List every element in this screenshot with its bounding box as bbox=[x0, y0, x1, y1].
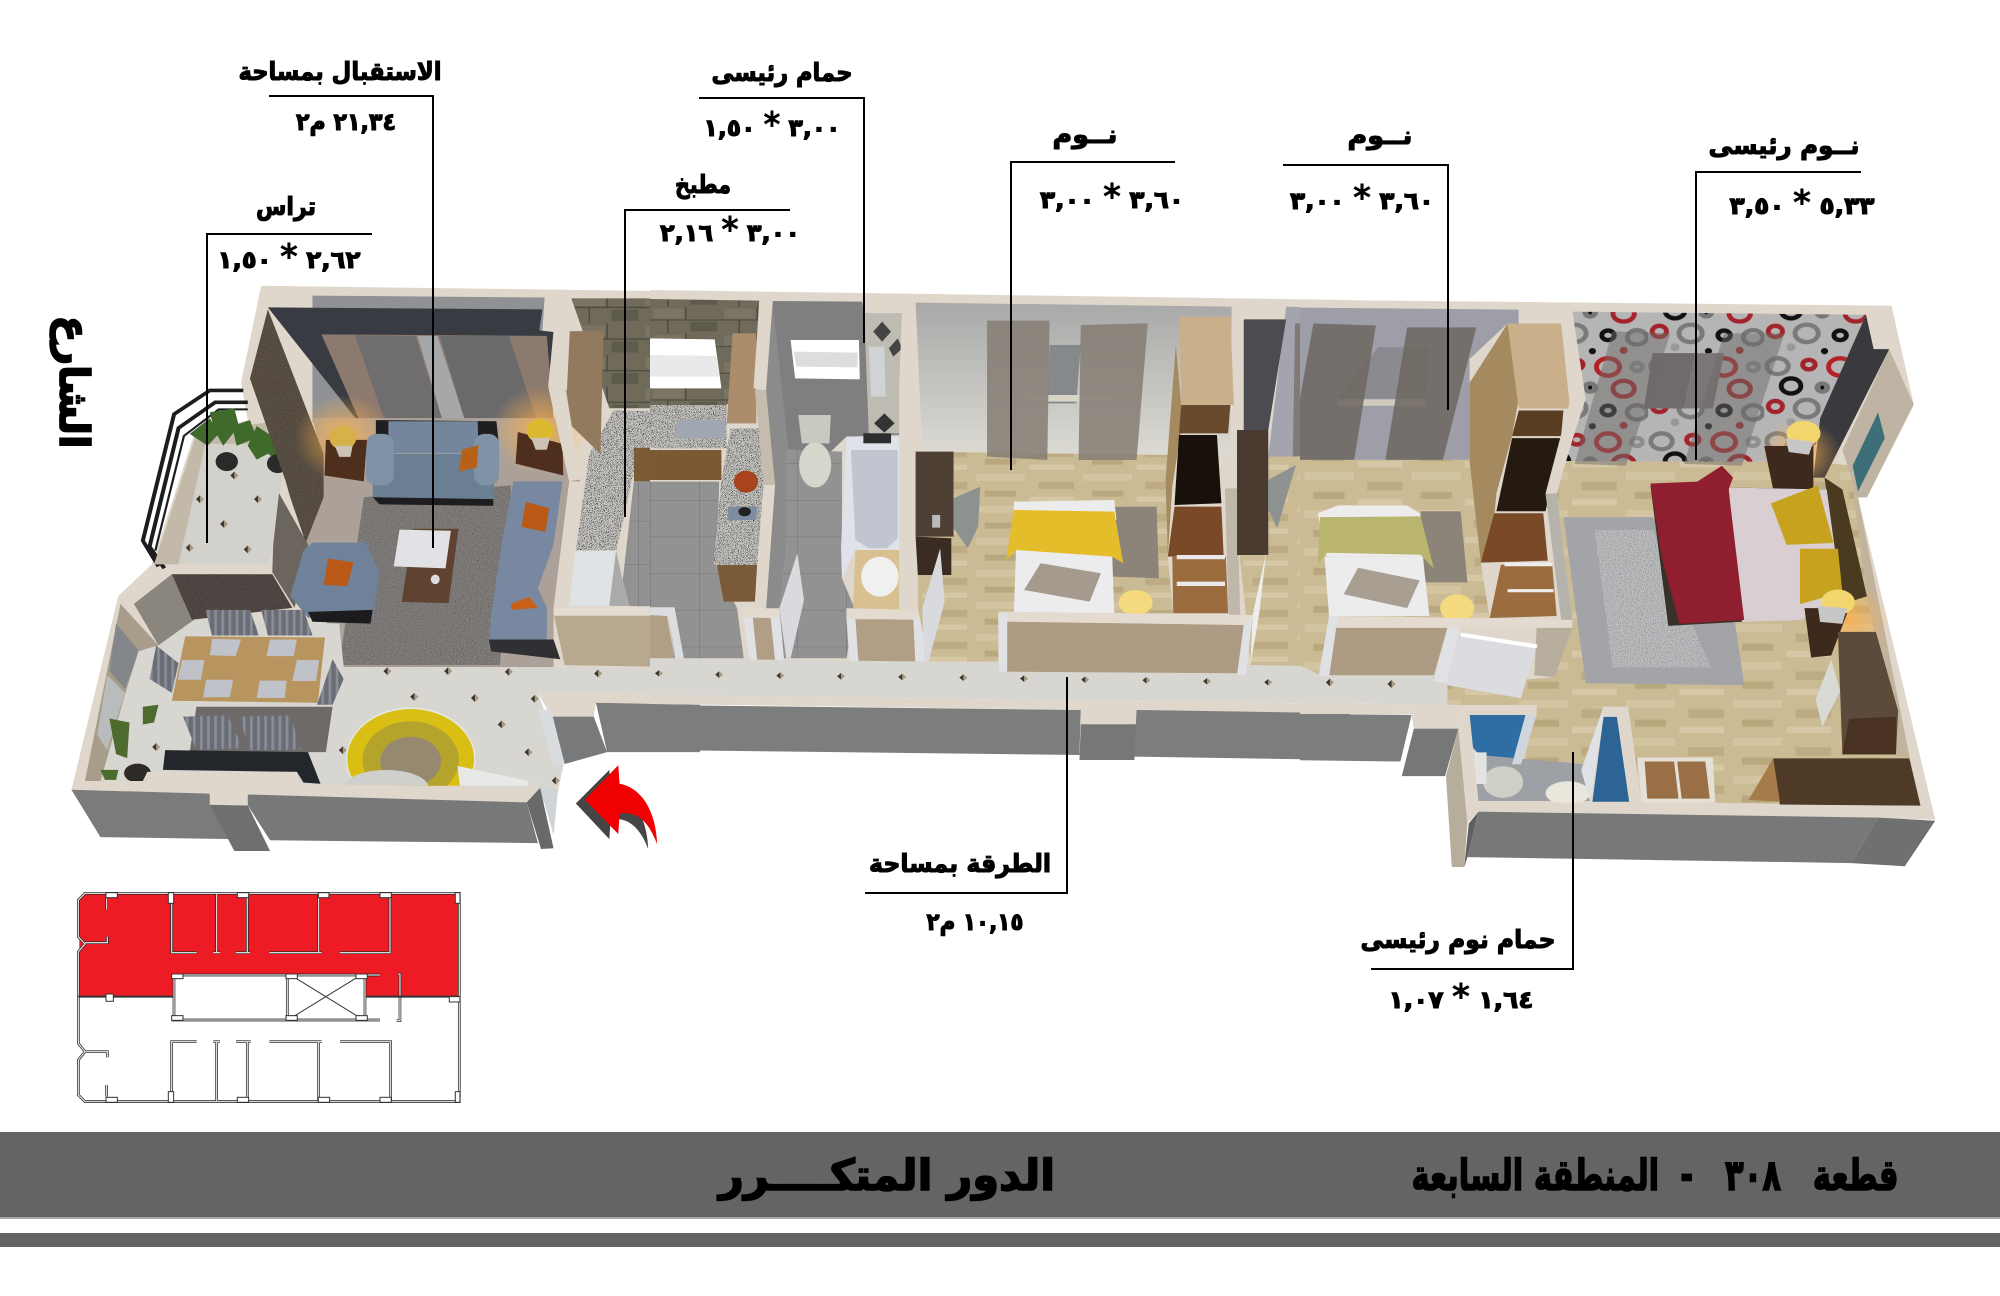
label: bedroom two bbox=[1290, 121, 1434, 218]
label: reception bbox=[238, 57, 442, 136]
label: terrace: ٢,٦٢ * ١,٥٠ bbox=[218, 237, 361, 277]
bath front partition bbox=[846, 608, 925, 671]
coffee table bbox=[394, 529, 458, 603]
bedroom one shell bbox=[916, 303, 1232, 662]
kitchen partition wall bbox=[554, 606, 685, 667]
label: master bath bbox=[1360, 925, 1556, 1017]
label: reception: ٢١,٣٤ م٢ bbox=[296, 108, 396, 136]
icon: dining plant bbox=[100, 705, 158, 783]
lower stripe bbox=[0, 1233, 2000, 1247]
patterned master wall bbox=[1566, 312, 1866, 466]
corridor and dining floor bbox=[85, 620, 700, 790]
label: bedroom one: ٣,٦٠ * ٣,٠٠ bbox=[1040, 177, 1184, 217]
corridor side wall bbox=[538, 693, 700, 766]
master rug bbox=[1563, 517, 1744, 685]
wall between bedrooms bbox=[1225, 300, 1286, 615]
key plan columns bbox=[106, 893, 460, 1102]
label: master bedroom: نــوم رئيسى bbox=[1708, 131, 1860, 161]
icon: terrace plants bbox=[190, 408, 288, 473]
label: kitchen: مطبخ bbox=[675, 170, 731, 200]
terrace walls and floor bbox=[154, 422, 286, 564]
bedroom two back wall bbox=[1300, 308, 1519, 464]
bedroom one desk and chair bbox=[916, 452, 980, 575]
label: master bedroom bbox=[1708, 131, 1875, 223]
floor plan: kitchen, bath, bedroom one and corridor bbox=[650, 290, 1350, 760]
right dark panel and wall bbox=[1813, 315, 1914, 756]
armchair bbox=[290, 543, 379, 624]
icon: entrance arrow bbox=[576, 765, 657, 849]
bedroom two left part bbox=[1237, 307, 1350, 667]
kitchen partition pieces bbox=[650, 607, 786, 668]
wall tops base bbox=[71, 286, 700, 802]
highlighted unit in red bbox=[79, 893, 459, 996]
dining chairs bbox=[150, 610, 344, 750]
label: master bath: ١,٦٤ * ١,٠٧ bbox=[1388, 977, 1534, 1017]
bedroom two floor and bed bbox=[1300, 460, 1490, 675]
leader lines bbox=[207, 96, 1861, 969]
reception rug bbox=[339, 485, 511, 665]
dining area walls bbox=[85, 574, 292, 782]
label: terrace bbox=[218, 192, 361, 277]
bedroom two partition left edge bbox=[1319, 615, 1350, 677]
key plan walls bbox=[78, 893, 459, 1102]
label: master bath: حمام نوم رئيسى bbox=[1360, 925, 1556, 955]
single bed bbox=[1006, 500, 1159, 615]
main bathroom bbox=[765, 301, 904, 658]
side tables and lamps bbox=[325, 419, 563, 481]
master bed bbox=[1650, 418, 1889, 658]
label: main bath: ٣,٠٠ * ١,٥٠ bbox=[704, 105, 840, 145]
label: kitchen bbox=[660, 170, 800, 250]
master bath walls bbox=[1461, 705, 1641, 812]
label: master bedroom: ٥,٣٣ * ٣,٥٠ bbox=[1730, 183, 1875, 223]
corridor end floor bbox=[1300, 665, 1447, 705]
master closet and shelves bbox=[1637, 758, 1920, 806]
right sofa bbox=[489, 481, 562, 659]
dining table with plates bbox=[172, 636, 325, 703]
label: terrace: تراس bbox=[256, 192, 316, 222]
walls between reception and kitchen bbox=[548, 298, 583, 608]
front wall bbox=[71, 772, 558, 851]
label: kitchen: ٣,٠٠ * ٢,١٦ bbox=[660, 210, 800, 250]
bedroom two partition and door bbox=[1319, 616, 1537, 698]
wall between bedroom two and master bbox=[1329, 310, 1584, 677]
bedroom one curtains and window bbox=[987, 321, 1148, 460]
bedroom one front partition bbox=[998, 553, 1266, 675]
bedroom two wardrobe bbox=[1470, 323, 1570, 618]
kitchen bbox=[650, 299, 764, 658]
wall tops base bbox=[1300, 300, 1935, 824]
terrace railing bbox=[143, 390, 248, 568]
kitchen left part bbox=[560, 298, 700, 695]
label: corridor bbox=[869, 849, 1051, 936]
label: corridor: ١٠,١٥ م٢ bbox=[927, 908, 1024, 936]
label: main bath: حمام رئيسى bbox=[712, 58, 852, 87]
wall between bath and bedroom bbox=[754, 300, 916, 608]
label: street: الشارع bbox=[50, 316, 98, 448]
south wall of master suite bbox=[1467, 802, 1935, 866]
label: bedroom two: نــوم bbox=[1348, 121, 1412, 151]
label: main bath bbox=[704, 58, 852, 145]
label: bedroom one: نــوم bbox=[1052, 120, 1118, 150]
label: corridor: الطرقة بمساحة bbox=[869, 849, 1051, 879]
bottom title band bbox=[0, 1132, 2000, 1219]
master bathroom bbox=[1470, 707, 1629, 805]
label: bedroom one bbox=[1040, 120, 1184, 217]
reception back wall and floor bbox=[250, 296, 589, 667]
tv unit bbox=[163, 750, 321, 784]
floor plan: reception, terrace and dining bbox=[71, 286, 700, 851]
key plan of the floor bbox=[78, 893, 460, 1102]
label: reception: الاستقبال بمساحة bbox=[238, 57, 442, 86]
main sofa bbox=[366, 420, 499, 506]
dining rug bbox=[190, 707, 333, 752]
corridor south wall bbox=[650, 695, 1350, 760]
bedroom one door bbox=[922, 548, 945, 662]
plot and zone title: قطعة ٣٠٨ - المنطقة السابعة bbox=[1412, 1151, 1898, 1201]
south wall of corridor end bbox=[1300, 703, 1479, 867]
wall tops base bbox=[650, 290, 1350, 704]
floor title: الدور المتكــــرر bbox=[717, 1151, 1055, 1201]
master bedroom floor bbox=[1447, 461, 1920, 806]
wardrobe bbox=[1166, 317, 1234, 613]
label: bedroom two: ٣,٦٠ * ٣,٠٠ bbox=[1290, 178, 1434, 218]
corridor floor bbox=[650, 658, 1350, 703]
floor plan: bedroom two and master suite bbox=[1300, 300, 1935, 867]
master desk bbox=[1816, 632, 1898, 754]
icon: yellow round rug bbox=[346, 708, 529, 786]
